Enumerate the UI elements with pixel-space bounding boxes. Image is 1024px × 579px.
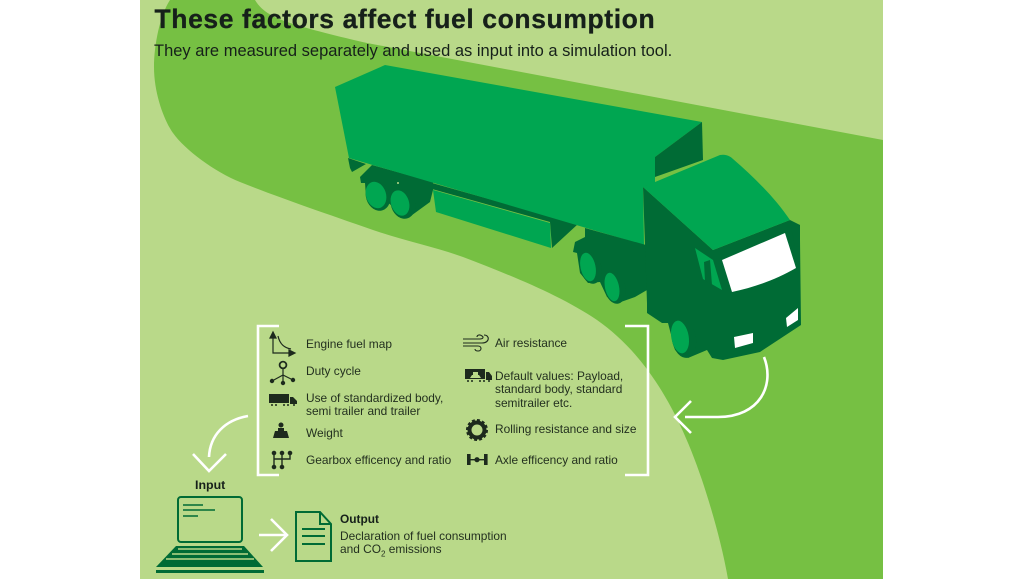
icon: gearbox	[272, 451, 292, 469]
trailer rear axle	[360, 165, 433, 218]
side mirror arm	[704, 260, 712, 285]
icon: axle	[467, 454, 488, 465]
label: default values: semitrailer etc.	[495, 396, 572, 410]
underrun stripe	[432, 183, 578, 248]
headlights	[734, 333, 753, 348]
label: default values: standard body, standard	[495, 382, 622, 396]
icon: default values truck	[465, 369, 492, 382]
side window	[695, 248, 722, 290]
label: axle: Axle efficency and ratio	[495, 453, 618, 467]
icon: document	[296, 512, 331, 561]
label: air resistance: Air resistance	[495, 336, 567, 350]
reflector dot	[397, 182, 399, 184]
label: rolling resistance: Rolling resistance and size	[495, 422, 636, 436]
road edge: upper light area	[255, 0, 883, 140]
output description: and CO2 emissions	[340, 542, 442, 558]
icon: standard truck	[269, 394, 297, 406]
drive tyres	[577, 250, 605, 286]
label: standardized body	[306, 391, 443, 418]
mirror	[790, 222, 800, 247]
label: duty cycle: Duty cycle	[306, 364, 361, 378]
front tyre	[669, 318, 699, 360]
label: standardized body: semi trailer and trailer	[306, 404, 420, 418]
left bracket	[258, 326, 279, 475]
wheels	[362, 179, 390, 211]
icon: weight	[273, 422, 289, 438]
output heading: Output	[340, 512, 379, 526]
title: These factors affect fuel consumption	[154, 4, 655, 34]
cab roof	[643, 155, 790, 250]
arrow: input to output	[259, 519, 287, 551]
icon: tyre	[467, 420, 487, 440]
truck	[335, 65, 801, 360]
road edge: lower light area	[140, 0, 728, 579]
label: default values	[495, 369, 623, 410]
trailer body	[335, 65, 702, 245]
windscreen	[722, 233, 796, 292]
label: default values: Default values: Payload,	[495, 369, 623, 383]
tractor drive axle	[573, 228, 647, 303]
icon: laptop	[156, 497, 264, 573]
right bracket	[625, 326, 648, 475]
label: gearbox: Gearbox efficency and ratio	[306, 453, 451, 467]
trailer front wedge	[655, 122, 703, 177]
label: weight: Weight	[306, 426, 343, 440]
cab body	[643, 187, 801, 360]
arrow: factors to input	[193, 416, 248, 471]
label: standardized body: Use of standardized body,	[306, 391, 443, 405]
label: engine fuel map: Engine fuel map	[306, 337, 392, 351]
background panel	[140, 0, 883, 579]
side skirt	[433, 190, 551, 248]
icon: duty cycle	[270, 362, 295, 385]
arrow: truck to factors	[675, 357, 767, 433]
output description: Declaration of fuel consumption	[340, 529, 507, 543]
subtitle: They are measured separately and used as input into a simulation tool.	[154, 42, 672, 60]
label: input: Input	[195, 478, 225, 492]
trailer rear corner detail	[348, 158, 366, 172]
icon: air resistance	[463, 335, 488, 351]
output description	[340, 529, 507, 558]
icon: engine fuel map	[270, 332, 295, 356]
rear tyres	[362, 178, 394, 214]
